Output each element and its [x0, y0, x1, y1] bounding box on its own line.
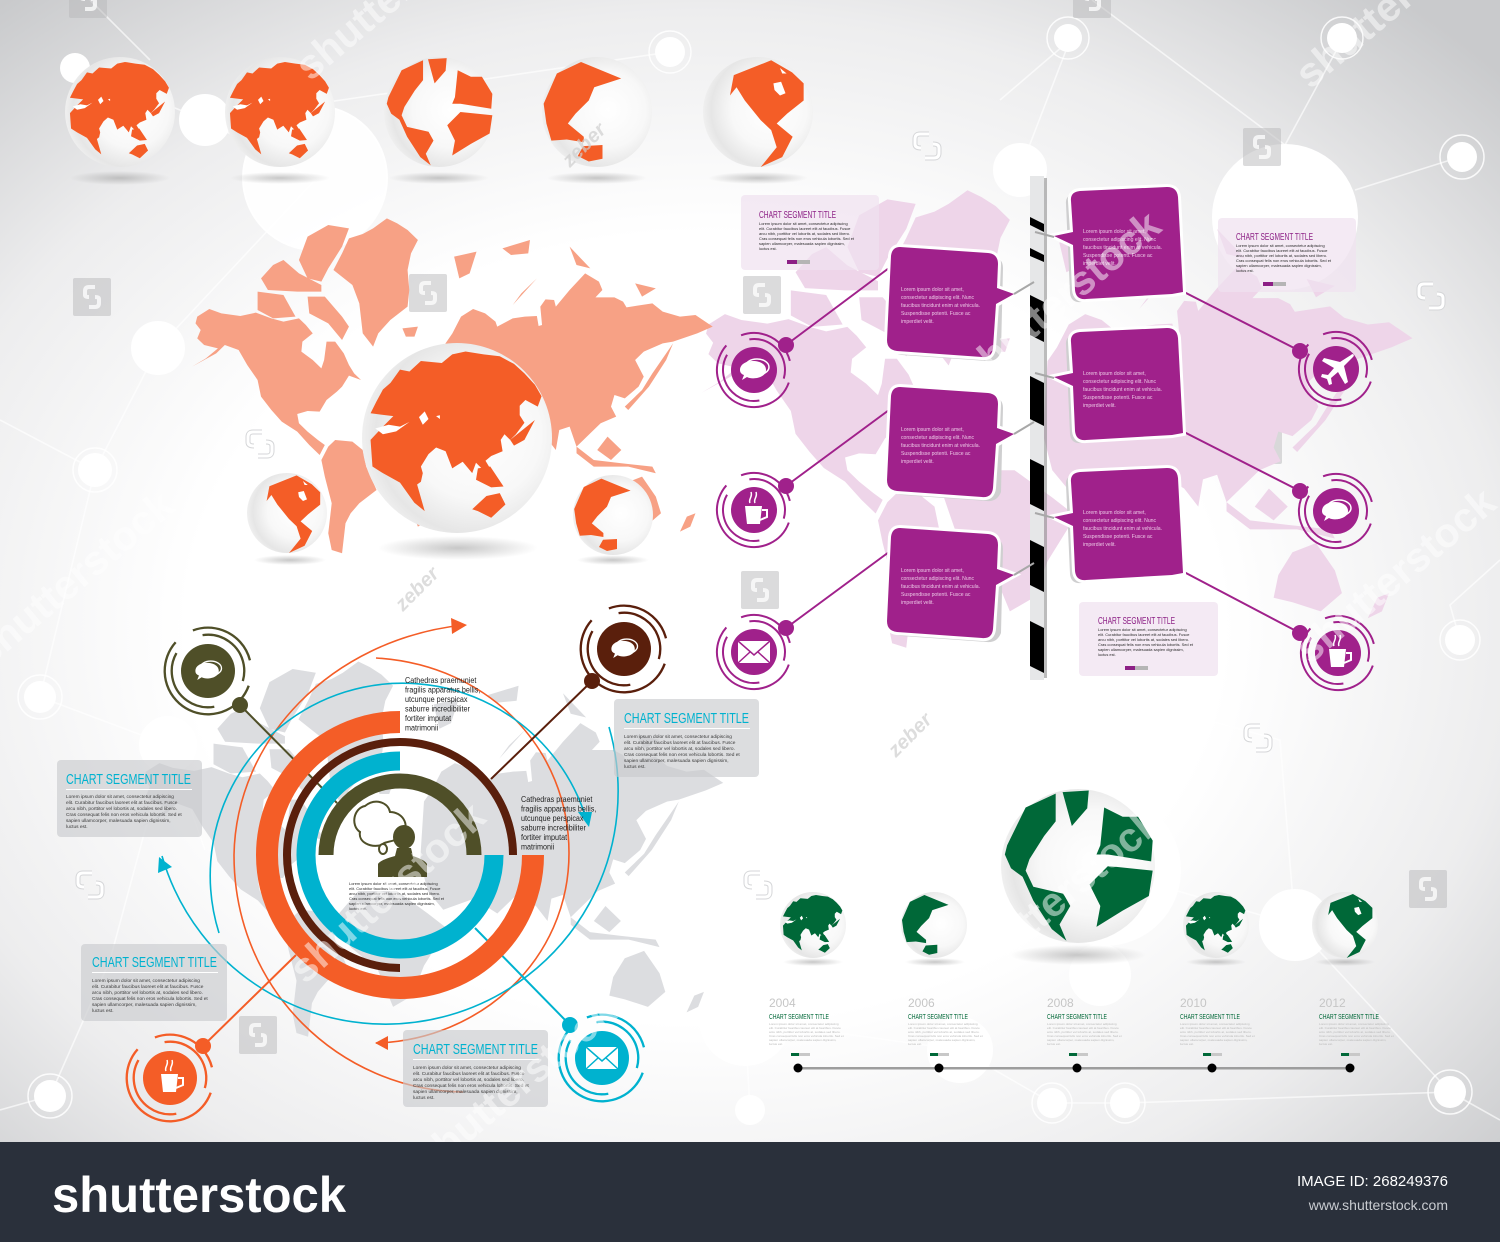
centre text: Cras consequat felis non eros vehicula lobortis. Sed et	[349, 896, 445, 901]
info box: bottom centre: CHART SEGMENT TITLE	[413, 1041, 538, 1058]
panel: green timeline	[769, 789, 1394, 1072]
callout: left column 1: faucibus tincidunt enim at vehicula.	[901, 303, 980, 309]
timeline entry 2006: elit. Curabitur faucibus laoreet elit at faucibus. Fusce	[908, 1026, 980, 1030]
timeline entry 2006: Cras consequat felis non eros vehicula lobortis. Sed et	[908, 1034, 983, 1038]
centre text: sapien ullamcorper, malesuada sapien dignissim,	[349, 901, 435, 906]
timeline entry 2012: Cras consequat felis non eros vehicula lobortis. Sed et	[1319, 1034, 1394, 1038]
callout: left column 3: consectetur adipiscing elit. Nunc	[901, 576, 975, 582]
large Asia globe	[362, 343, 552, 560]
info box: top right: CHART SEGMENT TITLE	[1236, 232, 1313, 243]
small Pacific globe	[573, 475, 653, 565]
callout: right column 3: Suspendisse potenti. Fusce ac	[1083, 534, 1153, 540]
salmon world map	[192, 218, 713, 553]
timeline entry 2010: elit. Curabitur faucibus laoreet elit at faucibus. Fusce	[1180, 1026, 1252, 1030]
globe 2010	[1183, 892, 1249, 958]
top row of orange globes	[65, 57, 813, 185]
footer logo: shutterstock	[52, 1167, 346, 1223]
timeline entry 2008: elit. Curabitur faucibus laoreet elit at faucibus. Fusce	[1047, 1026, 1119, 1030]
callout: left column 1: Suspendisse potenti. Fusce ac	[901, 311, 971, 317]
callout: right column 1	[1035, 187, 1183, 302]
callout: left column 2: imperdiet velit.	[901, 459, 934, 465]
grey world map behind circular chart	[140, 662, 723, 1037]
side note top: saburre incredibiliter	[405, 704, 470, 714]
side note right: matrimonii	[521, 842, 555, 852]
callout: right column 3: imperdiet velit.	[1083, 542, 1116, 548]
callout: right column 1: consectetur adipiscing elit. Nunc	[1083, 237, 1157, 243]
side note top: utcunque perspicax	[405, 695, 468, 704]
info box: top right: arcu nibh, porttitor vel lobortis at, sodales sed libero.	[1236, 253, 1327, 258]
globe 5: Americas	[703, 57, 813, 167]
timeline entry 2004: Lorem ipsum dolor sit amet, consectetur adipiscing	[769, 1022, 839, 1026]
callout: left column 3: Lorem ipsum dolor sit amet,	[901, 568, 964, 574]
info box: bottom centre: elit. Curabitur faucibus laoreet elit at faucibus. Fusce	[413, 1071, 525, 1077]
icon: orange cup	[115, 1023, 225, 1133]
side note top: Cathedras praemuniet	[405, 676, 477, 685]
timeline entry 2012: 2012	[1319, 996, 1346, 1010]
striped vertical pole	[1030, 176, 1047, 680]
info box: bottom left	[81, 944, 227, 1021]
icon: olive chat	[153, 616, 263, 726]
info box: bottom centre: sapien ullamcorper, malesuada sapien dignissim,	[413, 1089, 518, 1095]
info box: bottom: arcu nibh, porttitor vel lobortis at, sodales sed libero.	[1098, 637, 1189, 642]
callout: left column 3: Suspendisse potenti. Fusce ac	[901, 592, 971, 598]
callout: right column 2: Lorem ipsum dolor sit amet,	[1083, 371, 1146, 377]
icon: brown chat	[569, 594, 679, 704]
info box: bottom: Cras consequat felis non eros vehicula lobortis. Sed et	[1098, 642, 1194, 647]
watermark text: zeber	[883, 708, 937, 762]
info box: top right	[1218, 218, 1356, 292]
timeline entry 2008: Lorem ipsum dolor sit amet, consectetur adipiscing	[1047, 1022, 1117, 1026]
timeline entry 2010: sapien ullamcorper, malesuada sapien dignissim,	[1180, 1038, 1248, 1042]
callout: left column 2: faucibus tincidunt enim at vehicula.	[901, 443, 980, 449]
timeline entry 2012: elit. Curabitur faucibus laoreet elit at faucibus. Fusce	[1319, 1026, 1391, 1030]
callout: left column 1: consectetur adipiscing elit. Nunc	[901, 295, 975, 301]
image id: IMAGE ID: 268249376	[1297, 1173, 1448, 1190]
timeline axis with dots	[794, 1064, 1354, 1072]
watermark text: shutterstock	[280, 793, 494, 992]
pink world map behind purple callouts	[701, 190, 1413, 648]
watermark text: zeber	[557, 118, 611, 172]
side note right: fragilis apparatus bellis,	[521, 804, 596, 814]
timeline entry 2008: arcu nibh, porttitor vel lobortis at, sodales sed libero.	[1047, 1030, 1119, 1034]
centre text: elit. Curabitur faucibus laoreet elit at faucibus. Fusce	[349, 886, 441, 891]
ring: cyan	[306, 761, 494, 949]
info box: top right: elit. Curabitur faucibus laoreet elit at faucibus. Fusce	[1236, 248, 1328, 253]
info box: top left: Lorem ipsum dolor sit amet, consectetur adipiscing	[759, 221, 848, 226]
callout: right column 1: imperdiet velit.	[1083, 261, 1116, 267]
small Americas globe	[247, 473, 327, 565]
orange globes over the salmon map	[247, 343, 653, 565]
callout: right column 3: consectetur adipiscing elit. Nunc	[1083, 518, 1157, 524]
globe shadows	[70, 171, 808, 185]
globe 4: Pacific	[542, 57, 652, 167]
info box: top right: Lorem ipsum dolor sit amet, consectetur adipiscing	[624, 734, 732, 740]
icon: plane right	[1289, 322, 1383, 416]
globe 2006	[901, 892, 967, 958]
watermark text: shutterstock	[1286, 478, 1500, 672]
callout: right column 1: Suspendisse potenti. Fusce ac	[1083, 253, 1153, 259]
timeline entry 2004	[769, 996, 844, 1056]
grey decorative tiles	[69, 0, 1447, 1054]
timeline entry 2008: 2008	[1047, 996, 1074, 1010]
side note right: utcunque perspicax	[521, 814, 584, 823]
centre text: arcu nibh, porttitor vel lobortis at, sodales sed libero.	[349, 891, 440, 896]
info box: top right: Lorem ipsum dolor sit amet, consectetur adipiscing	[1236, 243, 1325, 248]
info box: top right: sapien ullamcorper, malesuada sapien dignissim,	[624, 758, 729, 764]
ring: brown	[287, 742, 513, 968]
icon: cup left	[707, 463, 801, 557]
info box: left	[57, 760, 202, 837]
callout: right column 3	[1035, 468, 1183, 583]
watermark text: shutterstock	[951, 201, 1169, 395]
callout: left column 1: imperdiet velit.	[901, 319, 934, 325]
info box: bottom centre: arcu nibh, porttitor vel lobortis at, sodales sed libero.	[413, 1077, 524, 1083]
info box: bottom left: Cras consequat felis non eros vehicula lobortis. Sed et	[92, 996, 208, 1002]
globe 1: Asia	[65, 57, 175, 167]
icon: cyan envelope	[547, 1003, 657, 1113]
timeline entry 2004: arcu nibh, porttitor vel lobortis at, sodales sed libero.	[769, 1030, 841, 1034]
panel: circular chart	[57, 594, 759, 1133]
callout: right column 2: faucibus tincidunt enim at vehicula.	[1083, 387, 1162, 393]
watermark text: shutterstock	[406, 988, 624, 1182]
icon: chat left	[707, 323, 801, 417]
callout: left column 3: faucibus tincidunt enim at vehicula.	[901, 584, 980, 590]
info box: left: sapien ullamcorper, malesuada sapien dignissim,	[66, 818, 171, 824]
info box: bottom left: CHART SEGMENT TITLE	[92, 954, 217, 971]
timeline entry 2006: arcu nibh, porttitor vel lobortis at, sodales sed libero.	[908, 1030, 980, 1034]
timeline entry 2010: luctus est.	[1180, 1042, 1194, 1046]
info box: bottom left: luctus est.	[92, 1008, 114, 1014]
side note right: Cathedras praemuniet	[521, 795, 593, 804]
callout: right column 2: Suspendisse potenti. Fusce ac	[1083, 395, 1153, 401]
watermark text: zeber	[390, 562, 444, 616]
thin orbit arrows	[162, 625, 618, 1092]
callout: right column 3: faucibus tincidunt enim at vehicula.	[1083, 526, 1162, 532]
timeline entry 2012: Lorem ipsum dolor sit amet, consectetur adipiscing	[1319, 1022, 1389, 1026]
info box: top right: arcu nibh, porttitor vel lobortis at, sodales sed libero.	[624, 746, 735, 752]
connector lines	[203, 681, 592, 1046]
timeline entry 2010: 2010	[1180, 996, 1207, 1010]
timeline entry 2006: CHART SEGMENT TITLE	[908, 1014, 968, 1021]
timeline entry 2006: luctus est.	[908, 1042, 922, 1046]
info box: top left: elit. Curabitur faucibus laoreet elit at faucibus. Fusce	[759, 226, 851, 231]
timeline entry 2008: sapien ullamcorper, malesuada sapien dignissim,	[1047, 1038, 1115, 1042]
info box: bottom: sapien ullamcorper, malesuada sapien dignissim,	[1098, 647, 1184, 652]
callout: right column 2: consectetur adipiscing elit. Nunc	[1083, 379, 1157, 385]
info box: left: CHART SEGMENT TITLE	[66, 771, 191, 788]
timeline entry 2006: sapien ullamcorper, malesuada sapien dignissim,	[908, 1038, 976, 1042]
info box: top right: CHART SEGMENT TITLE	[624, 710, 749, 727]
globe 2: Asia and Africa	[225, 57, 335, 167]
icon: envelope left	[707, 605, 801, 699]
callout: right column 3: Lorem ipsum dolor sit amet,	[1083, 510, 1146, 516]
timeline entry 2012: arcu nibh, porttitor vel lobortis at, sodales sed libero.	[1319, 1030, 1391, 1034]
arrowheads	[158, 618, 592, 1050]
timeline entry 2008: Cras consequat felis non eros vehicula lobortis. Sed et	[1047, 1034, 1122, 1038]
info box: left: elit. Curabitur faucibus laoreet elit at faucibus. Fusce	[66, 800, 178, 806]
info box: bottom left: sapien ullamcorper, malesuada sapien dignissim,	[92, 1002, 197, 1008]
info box: bottom: Lorem ipsum dolor sit amet, consectetur adipiscing	[1098, 627, 1187, 632]
timeline entry 2004: elit. Curabitur faucibus laoreet elit at faucibus. Fusce	[769, 1026, 841, 1030]
callout: left column 1	[887, 247, 1034, 361]
globe 2004	[780, 892, 846, 958]
callout: right column 2: imperdiet velit.	[1083, 403, 1116, 409]
info box: top right: luctus est.	[1236, 268, 1254, 273]
callout: right column 1: Lorem ipsum dolor sit amet,	[1083, 229, 1146, 235]
info box: top left: arcu nibh, porttitor vel lobortis at, sodales sed libero.	[759, 231, 850, 236]
timeline entry 2006: Lorem ipsum dolor sit amet, consectetur adipiscing	[908, 1022, 978, 1026]
timeline entry 2004: CHART SEGMENT TITLE	[769, 1014, 829, 1021]
info box: bottom left: Lorem ipsum dolor sit amet, consectetur adipiscing	[92, 978, 200, 984]
info box: left: Lorem ipsum dolor sit amet, consectetur adipiscing	[66, 794, 174, 800]
timeline entry 2010: Cras consequat felis non eros vehicula lobortis. Sed et	[1180, 1034, 1255, 1038]
icon: cup right	[1291, 606, 1385, 700]
centre text: Lorem ipsum dolor sit amet, consectetur adipiscing	[349, 881, 438, 886]
info box: bottom left: arcu nibh, porttitor vel lobortis at, sodales sed libero.	[92, 990, 203, 996]
timeline entry 2012	[1319, 996, 1394, 1056]
info box: top right: sapien ullamcorper, malesuada sapien dignissim,	[1236, 263, 1322, 268]
globe shadows	[783, 945, 1375, 966]
ring: orange	[267, 722, 533, 988]
info box: top right	[614, 699, 759, 777]
timeline entry 2008: CHART SEGMENT TITLE	[1047, 1014, 1107, 1021]
timeline entry 2008: luctus est.	[1047, 1042, 1061, 1046]
icon: chat right	[1289, 464, 1383, 558]
callout: left column 3	[887, 528, 1034, 642]
info box: top right: elit. Curabitur faucibus laoreet elit at faucibus. Fusce	[624, 740, 736, 746]
purple connector lines	[786, 268, 1300, 633]
info box: left: Cras consequat felis non eros vehicula lobortis. Sed et	[66, 812, 182, 818]
panel: purple callouts	[707, 176, 1385, 700]
info box: top left: luctus est.	[759, 246, 777, 251]
callout: left column 3: imperdiet velit.	[901, 600, 934, 606]
timeline entry 2006	[908, 996, 983, 1056]
icon: person with thought cloud	[354, 802, 427, 877]
info box: left: arcu nibh, porttitor vel lobortis at, sodales sed libero.	[66, 806, 177, 812]
info box: bottom left: elit. Curabitur faucibus laoreet elit at faucibus. Fusce	[92, 984, 204, 990]
callout: right column 1: faucibus tincidunt enim at vehicula.	[1083, 245, 1162, 251]
globe 3: Atlantic	[384, 57, 494, 167]
callout: left column 2	[887, 387, 1034, 501]
info box: top left	[741, 195, 879, 270]
globe 2012	[1312, 892, 1378, 958]
info box: left: luctus est.	[66, 824, 88, 830]
info box: bottom	[1079, 602, 1218, 676]
callout: left column 2: consectetur adipiscing elit. Nunc	[901, 435, 975, 441]
info box: top left: CHART SEGMENT TITLE	[759, 210, 836, 221]
timeline entry 2012: luctus est.	[1319, 1042, 1333, 1046]
timeline entry 2008	[1047, 996, 1122, 1056]
large globe	[1001, 789, 1155, 943]
centre text: luctus est.	[349, 906, 367, 911]
info box: bottom: elit. Curabitur faucibus laoreet elit at faucibus. Fusce	[1098, 632, 1190, 637]
side note right: saburre incredibiliter	[521, 823, 586, 833]
info box: top right: Cras consequat felis non eros vehicula lobortis. Sed et	[1236, 258, 1332, 263]
timeline entry 2010: CHART SEGMENT TITLE	[1180, 1014, 1240, 1021]
info box: bottom: luctus est.	[1098, 652, 1116, 657]
info box: top right: luctus est.	[624, 764, 646, 770]
site url: www.shutterstock.com	[1308, 1197, 1448, 1213]
info box: top left: Cras consequat felis non eros vehicula lobortis. Sed et	[759, 236, 855, 241]
timeline entry 2012: sapien ullamcorper, malesuada sapien dignissim,	[1319, 1038, 1387, 1042]
info box: top right: Cras consequat felis non eros vehicula lobortis. Sed et	[624, 752, 740, 758]
info box: bottom centre: luctus est.	[413, 1095, 435, 1101]
timeline entry 2010: Lorem ipsum dolor sit amet, consectetur adipiscing	[1180, 1022, 1250, 1026]
info box: bottom centre: Cras consequat felis non eros vehicula lobortis. Sed et	[413, 1083, 529, 1089]
info box: top left: sapien ullamcorper, malesuada sapien dignissim,	[759, 241, 845, 246]
watermark text: shutterstock	[951, 798, 1169, 992]
info box: bottom: CHART SEGMENT TITLE	[1098, 616, 1175, 627]
side note top: fortiter imputat	[405, 714, 452, 723]
timeline entry 2010	[1180, 996, 1255, 1056]
timeline entry 2004: luctus est.	[769, 1042, 783, 1046]
callout: right column 2	[1035, 328, 1183, 443]
footer bar	[0, 1142, 1500, 1242]
callout: left column 2: Lorem ipsum dolor sit amet,	[901, 427, 964, 433]
timeline entry 2006: 2006	[908, 996, 935, 1010]
callout: left column 2: Suspendisse potenti. Fusce ac	[901, 451, 971, 457]
timeline entry 2012: CHART SEGMENT TITLE	[1319, 1014, 1379, 1021]
callout: left column 1: Lorem ipsum dolor sit amet,	[901, 287, 964, 293]
side note right: fortiter imputat	[521, 833, 568, 842]
side note top: matrimonii	[405, 723, 439, 733]
timeline entry 2010: arcu nibh, porttitor vel lobortis at, sodales sed libero.	[1180, 1030, 1252, 1034]
info box: bottom centre	[403, 1030, 548, 1107]
info box: bottom centre: Lorem ipsum dolor sit amet, consectetur adipiscing	[413, 1065, 521, 1071]
side note top: fragilis apparatus bellis,	[405, 685, 480, 695]
timeline entry 2004: Cras consequat felis non eros vehicula lobortis. Sed et	[769, 1034, 844, 1038]
timeline entry 2004: 2004	[769, 996, 796, 1010]
timeline entry 2004: sapien ullamcorper, malesuada sapien dignissim,	[769, 1038, 837, 1042]
ring: olive	[326, 781, 474, 855]
